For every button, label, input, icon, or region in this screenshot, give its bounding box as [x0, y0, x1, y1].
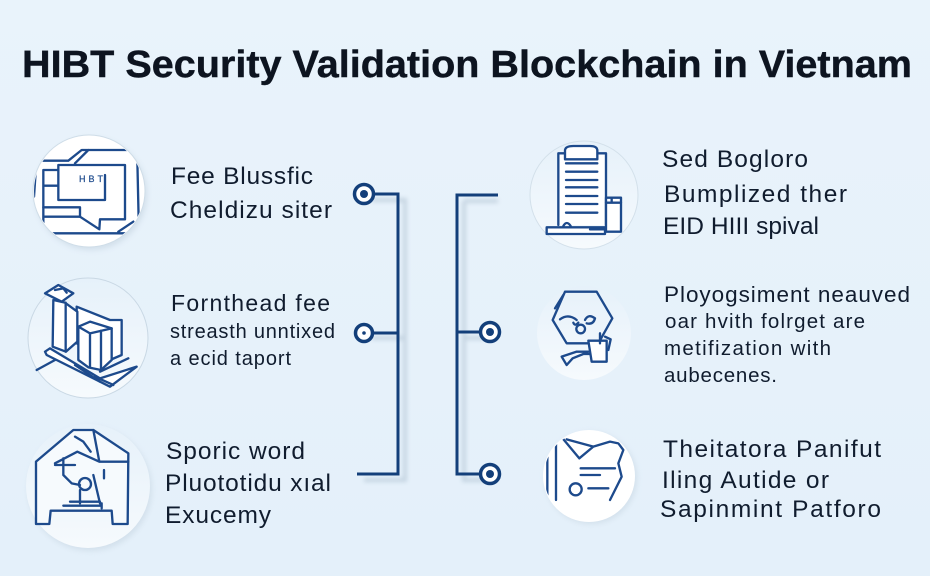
panel: left item 1 — [33, 135, 332, 250]
text: right item 2: metifization with — [664, 337, 831, 360]
text: left item 1: Fee Blussfic — [171, 163, 313, 190]
connector: left bracket — [354, 184, 405, 480]
text: left item 3: Sporic word — [166, 438, 305, 465]
text: right item 1: EID HIII spival — [663, 213, 819, 240]
node: right bottom — [480, 464, 500, 484]
text: right item 3: Iling Autide or — [662, 467, 829, 494]
text: right item 2: Ployogsiment neauved — [664, 282, 910, 307]
icon: hexagon face with hand — [537, 286, 631, 380]
panel: left item 2 — [28, 278, 335, 398]
title: HIBT Security Validation Blockchain in Vietnam — [22, 44, 912, 86]
text: left item 2: Fornthead fee — [171, 290, 330, 316]
text: left item 3 — [165, 438, 331, 529]
icon: shirt document — [543, 430, 637, 524]
text: left item 3: Pluototidu xıal — [165, 470, 331, 497]
text: left item 1: Cheldizu siter — [170, 197, 332, 224]
text: right item 3 — [660, 436, 881, 523]
text: right item 2: aubecenes. — [664, 364, 777, 387]
panel: right item 1 — [530, 141, 847, 249]
node: left middle — [356, 324, 372, 342]
text: right item 2 — [664, 282, 910, 387]
text: right item 3: Sapinmint Patforo — [660, 496, 881, 523]
text: left item 2 — [170, 290, 335, 370]
text: right item 3: Theitatora Panifut — [663, 436, 881, 463]
icon: house with figure — [26, 424, 152, 551]
text: left item 3: Exucemy — [165, 502, 272, 529]
panel: right item 3 — [543, 430, 881, 524]
connector: right bracket — [457, 195, 500, 484]
text: left item 1 — [170, 163, 332, 224]
text: left item 2: streasth unntixed — [170, 321, 335, 343]
text: right item 1: Bumplized ther — [664, 181, 847, 208]
icon: HBT blockchain screen: HBT — [79, 174, 104, 184]
panel: right item 2 — [537, 282, 910, 387]
text: right item 2: oar hvith folrget are — [665, 310, 865, 333]
node: right middle — [480, 322, 500, 342]
text: right item 1: Sed Bogloro — [662, 146, 808, 173]
node: left top — [354, 184, 374, 204]
icon: clipboard document — [530, 141, 638, 249]
text: left item 2: a ecid taport — [170, 348, 291, 370]
panel: left item 3 — [26, 424, 331, 551]
icon: isometric columns — [28, 278, 148, 398]
text: right item 1 — [662, 146, 847, 240]
icon: HBT blockchain screen — [33, 135, 147, 250]
